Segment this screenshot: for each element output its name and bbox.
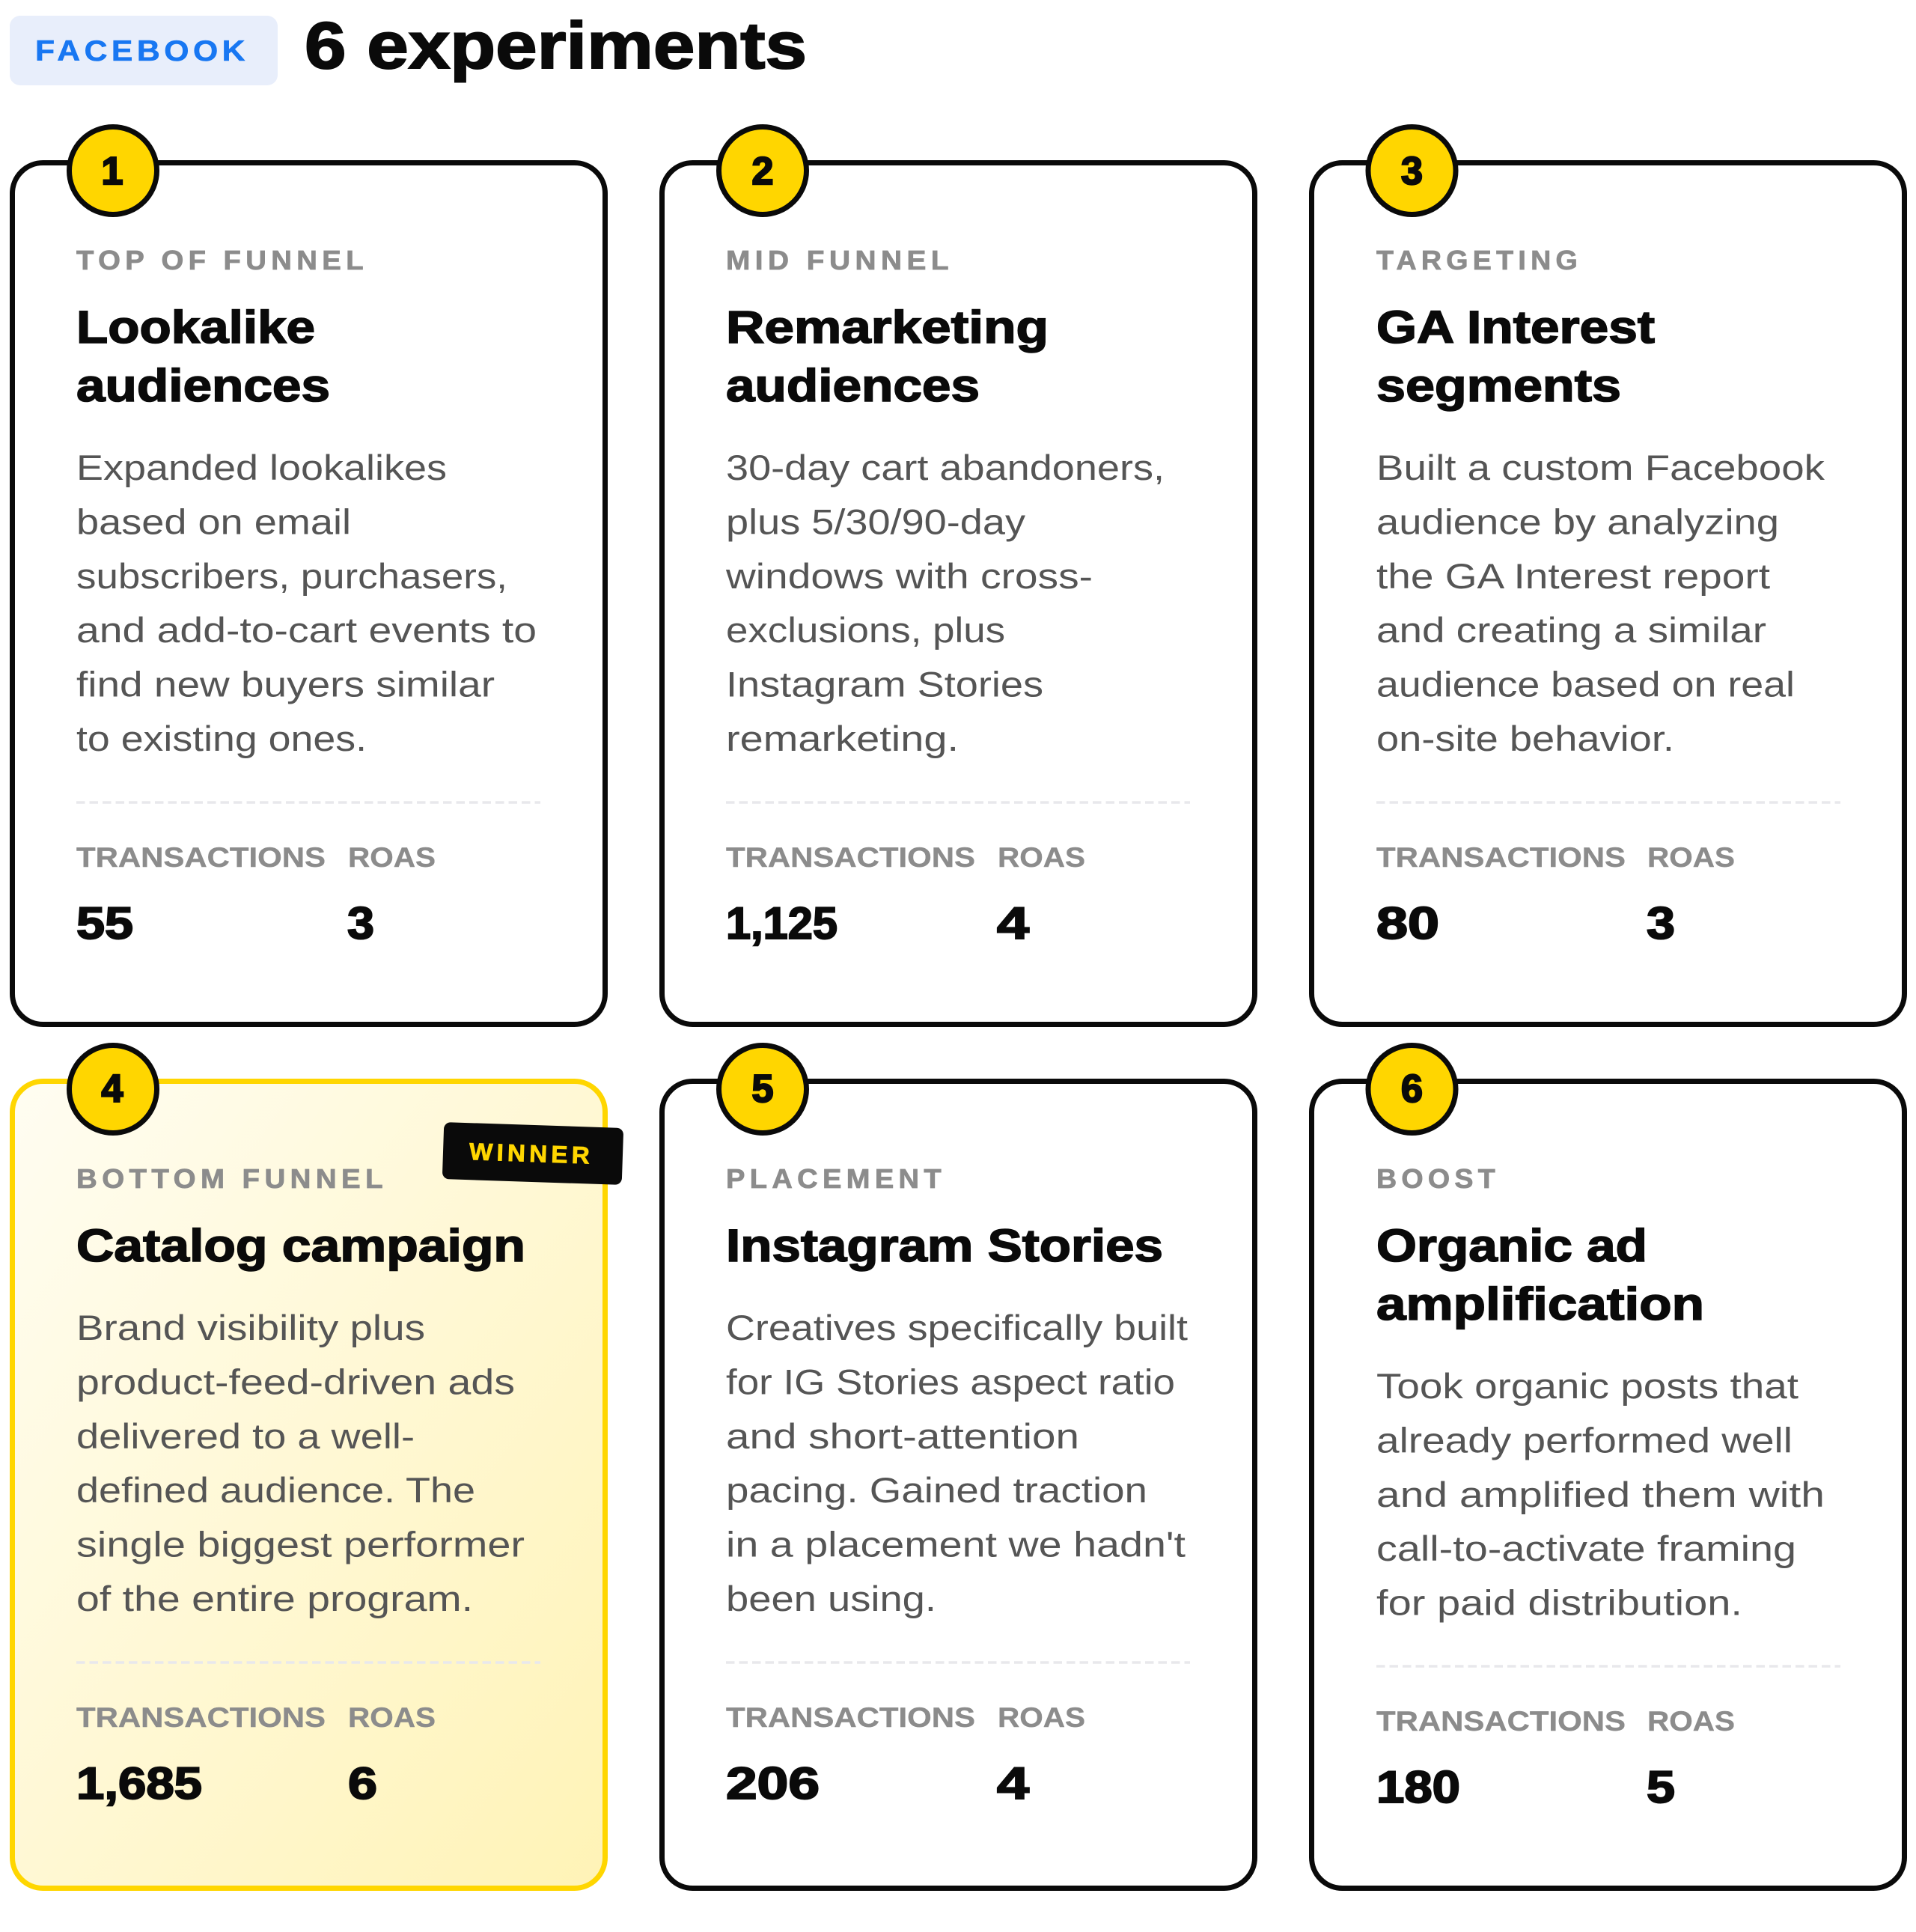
number badge — [718, 1045, 807, 1133]
card border — [1311, 1081, 1904, 1888]
number badge — [1368, 127, 1456, 214]
metric: roas — [348, 1702, 436, 1808]
description — [76, 1308, 525, 1618]
metric: roas — [1647, 1706, 1735, 1812]
metric: roas: ROAS — [348, 1702, 436, 1733]
description: exclusions, plus — [726, 610, 1005, 650]
metric: roas: 6 — [348, 1758, 377, 1808]
description — [726, 1308, 1188, 1618]
metric: transactions: TRANSACTIONS — [726, 842, 975, 873]
description: product-feed-driven ads — [76, 1362, 515, 1401]
metric: roas: 3 — [347, 898, 374, 948]
heading: Remarketing — [726, 302, 1049, 353]
metric: transactions: TRANSACTIONS — [1376, 1706, 1626, 1737]
heading: audiences — [76, 360, 330, 411]
number badge — [69, 127, 157, 214]
panel: experiment 1 — [12, 127, 605, 1024]
metric: transactions — [1376, 1706, 1626, 1812]
category label: BOTTOM FUNNEL — [76, 1163, 388, 1194]
metric: roas: ROAS — [1647, 1706, 1735, 1737]
card border — [12, 1081, 605, 1888]
metric: transactions: 80 — [1376, 898, 1439, 948]
description: audience based on real — [1376, 665, 1795, 704]
number badge: 3 — [1401, 150, 1423, 193]
description: find new buyers similar — [76, 665, 495, 704]
metric: roas: 4 — [997, 898, 1030, 948]
description: 30-day cart abandoners, — [726, 448, 1165, 487]
metric: transactions: 206 — [726, 1758, 820, 1808]
heading: amplification — [1376, 1279, 1704, 1329]
metric: transactions — [726, 842, 975, 948]
metric: transactions — [1376, 842, 1626, 948]
description: single biggest performer — [76, 1525, 525, 1564]
number badge — [1368, 1045, 1456, 1133]
description: the GA Interest report — [1376, 556, 1770, 596]
heading: Catalog campaign — [76, 1220, 525, 1271]
category label: TARGETING — [1376, 245, 1582, 275]
metric: transactions: TRANSACTIONS — [726, 1702, 975, 1733]
description: to existing ones. — [76, 719, 367, 758]
heading — [1376, 302, 1655, 411]
number badge: 2 — [752, 150, 773, 193]
description: in a placement we hadn't — [726, 1525, 1186, 1564]
metric: roas — [347, 842, 436, 948]
category label: MID FUNNEL — [726, 245, 954, 275]
metric: transactions: 1,685 — [76, 1758, 202, 1808]
description: based on email — [76, 502, 351, 541]
card border — [662, 163, 1254, 1024]
metric: roas — [1647, 842, 1735, 948]
heading: audiences — [726, 360, 980, 411]
panel: experiment 6 — [1311, 1045, 1904, 1888]
metric: transactions: 55 — [76, 898, 133, 948]
winner tag — [442, 1122, 623, 1185]
category label: TOP OF FUNNEL — [76, 245, 368, 275]
platform badge: FACEBOOK — [35, 35, 249, 67]
platform badge — [10, 16, 278, 85]
heading: Lookalike — [76, 302, 315, 353]
description: and creating a similar — [1376, 610, 1766, 650]
description: Built a custom Facebook — [1376, 448, 1825, 487]
description: and short-attention — [726, 1416, 1079, 1456]
metric: roas: ROAS — [998, 1702, 1085, 1733]
metric: roas — [997, 1702, 1085, 1808]
heading: segments — [1376, 360, 1621, 411]
description — [1376, 448, 1825, 758]
panel: experiment 4 (winner) — [12, 1045, 623, 1888]
description: Instagram Stories — [726, 665, 1043, 704]
panel: experiment 3 — [1311, 127, 1904, 1024]
heading — [1376, 1220, 1704, 1329]
description: call-to-activate framing — [1376, 1529, 1796, 1568]
number badge: 1 — [102, 150, 123, 193]
metric: transactions — [76, 842, 326, 948]
number badge: 6 — [1401, 1067, 1423, 1111]
description: Expanded lookalikes — [76, 448, 447, 487]
winner tag: WINNER — [469, 1138, 594, 1169]
metric: transactions: 180 — [1376, 1762, 1460, 1812]
panel: experiment 2 — [662, 127, 1254, 1024]
metric: roas: ROAS — [1647, 842, 1735, 873]
heading: Organic ad — [1376, 1220, 1647, 1271]
heading — [76, 302, 330, 411]
description: been using. — [726, 1579, 936, 1618]
description — [1376, 1366, 1825, 1623]
description: for paid distribution. — [1376, 1583, 1742, 1623]
metric: roas: 4 — [997, 1758, 1030, 1808]
description: and amplified them with — [1376, 1475, 1825, 1514]
category label: PLACEMENT — [726, 1163, 946, 1194]
category label: BOOST — [1376, 1163, 1500, 1194]
metric: roas: ROAS — [998, 842, 1085, 873]
number badge — [718, 127, 807, 214]
heading — [726, 302, 1049, 411]
description: already performed well — [1376, 1420, 1793, 1460]
description: pacing. Gained traction — [726, 1470, 1147, 1510]
card border — [662, 1081, 1254, 1888]
metric: transactions: TRANSACTIONS — [1376, 842, 1626, 873]
description: and add-to-cart events to — [76, 610, 537, 650]
description: Creatives specifically built — [726, 1308, 1188, 1347]
description — [725, 448, 1165, 758]
heading: Instagram Stories — [726, 1220, 1163, 1271]
metric: roas: 5 — [1647, 1762, 1675, 1812]
description: audience by analyzing — [1376, 502, 1779, 541]
description: of the entire program. — [76, 1579, 473, 1618]
panel: experiment 5 — [662, 1045, 1254, 1888]
number badge: 5 — [752, 1067, 773, 1111]
card border — [12, 163, 605, 1024]
description: Brand visibility plus — [76, 1308, 425, 1347]
heading: GA Interest — [1376, 302, 1655, 353]
description: subscribers, purchasers, — [76, 556, 507, 596]
metric: roas: ROAS — [348, 842, 436, 873]
card border — [1311, 163, 1904, 1024]
number badge — [69, 1045, 157, 1133]
metric: transactions — [76, 1702, 326, 1808]
metric: transactions: TRANSACTIONS — [76, 1702, 326, 1733]
description: for IG Stories aspect ratio — [726, 1362, 1175, 1401]
metric: roas — [997, 842, 1085, 948]
metric: transactions: TRANSACTIONS — [76, 842, 326, 873]
description — [76, 448, 537, 758]
description: delivered to a well- — [76, 1416, 415, 1456]
description: plus 5/30/90-day — [726, 502, 1026, 541]
number badge: 4 — [102, 1067, 123, 1111]
title: 6 experiments — [305, 8, 807, 82]
description: defined audience. The — [76, 1470, 475, 1510]
description: on-site behavior. — [1376, 719, 1674, 758]
metric: transactions: 1,125 — [726, 898, 838, 948]
description: remarketing. — [726, 719, 959, 758]
metric: transactions — [726, 1702, 975, 1808]
header — [10, 8, 807, 85]
description: windows with cross- — [725, 556, 1093, 596]
description: Took organic posts that — [1376, 1366, 1798, 1406]
metric: roas: 3 — [1647, 898, 1675, 948]
